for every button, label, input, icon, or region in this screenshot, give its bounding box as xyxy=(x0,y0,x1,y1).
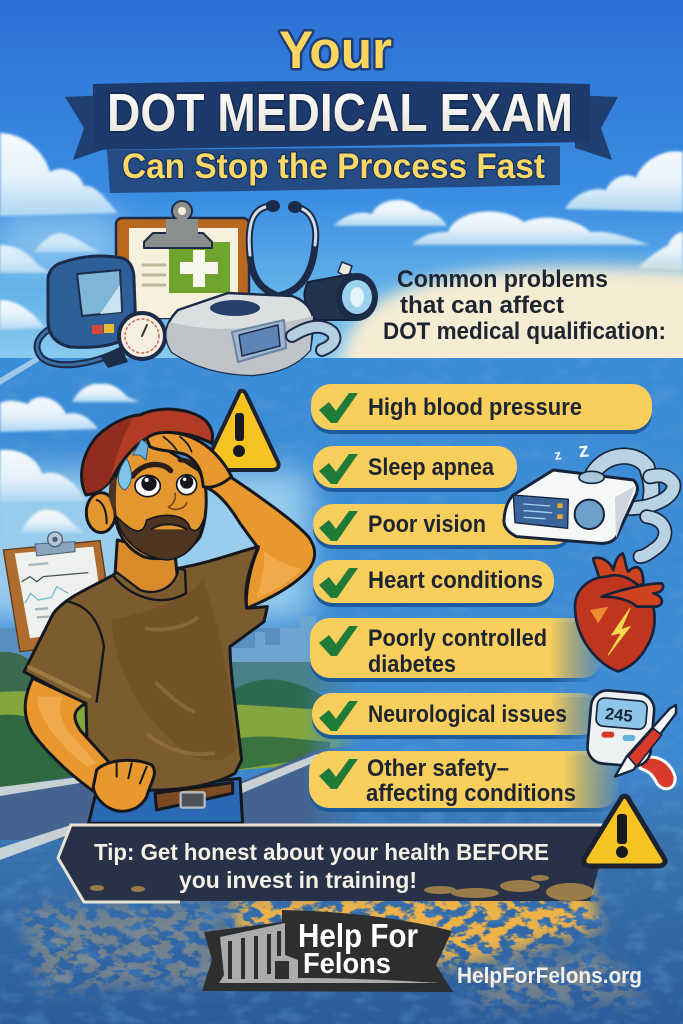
tan stains xyxy=(20,900,650,1010)
subtitle: Can Stop the Process Fast xyxy=(122,147,545,186)
intro line 3: DOT medical qualification: xyxy=(383,318,666,345)
lightning bolt xyxy=(608,608,630,655)
stethoscope xyxy=(249,200,316,322)
dropper xyxy=(615,705,676,777)
sleep letters: z xyxy=(553,446,562,463)
clipboard xyxy=(116,201,249,318)
intro line 1: Common problems xyxy=(397,266,608,293)
logo building xyxy=(219,923,440,983)
item: sleep apnea xyxy=(313,446,517,492)
background lighter sky behind man xyxy=(0,470,310,620)
title: DOT MEDICAL EXAM: DOT MEDICAL EXAM xyxy=(107,83,573,143)
tip text: Tip: Get honest about your health BEFORE xyxy=(94,839,549,865)
logo: Help For Felons xyxy=(202,910,453,992)
item: other safety-affecting conditions xyxy=(309,751,619,812)
checklist xyxy=(309,384,652,812)
shirt collar xyxy=(113,568,186,600)
title xyxy=(65,21,618,193)
CPAP top button xyxy=(579,471,604,483)
aorta xyxy=(593,553,643,600)
neck xyxy=(115,540,178,594)
warning sign lower xyxy=(584,796,665,866)
item: heart conditions: Heart conditions xyxy=(368,567,543,594)
CPAP knob xyxy=(575,500,604,529)
banner stains xyxy=(90,875,594,901)
meter reading: 245 xyxy=(604,704,634,726)
cap back panel xyxy=(83,418,133,493)
icon: heart xyxy=(575,553,663,671)
shirt xyxy=(24,547,267,790)
clouds xyxy=(0,133,683,533)
fist xyxy=(93,760,154,811)
raised arm xyxy=(203,476,315,608)
item: poorly controlled diabetes: diabetes xyxy=(368,651,456,678)
item: poorly controlled diabetes xyxy=(310,618,602,682)
blood pressure monitor xyxy=(48,256,136,347)
item: sleep apnea: Sleep apnea xyxy=(368,454,495,481)
pressure gauge xyxy=(100,313,165,368)
item: heart conditions xyxy=(313,560,554,607)
ribbon left tail xyxy=(65,95,108,160)
item: other safety-affecting conditions: Other safety– xyxy=(367,755,509,782)
background sky xyxy=(0,0,683,362)
thermometer bulb xyxy=(640,757,675,789)
sweat drops xyxy=(118,458,131,490)
camera style lens device xyxy=(304,262,378,321)
ribbon right tail xyxy=(575,95,618,160)
belt buckle xyxy=(181,792,205,808)
hand on forehead xyxy=(147,432,232,487)
tip text xyxy=(94,839,549,893)
tip text: you invest in training! xyxy=(179,867,417,893)
red cap xyxy=(82,409,213,495)
nose xyxy=(168,493,187,509)
mouth xyxy=(152,524,187,529)
beard xyxy=(117,515,203,560)
cream panel behind intro text xyxy=(330,254,683,358)
background lower blue xyxy=(0,358,683,1024)
icon: glucose meter and thermometer xyxy=(586,689,676,789)
item: poorly controlled diabetes: Poorly controlled xyxy=(368,625,547,652)
road markings xyxy=(0,754,322,860)
clipboard with chart behind man xyxy=(3,532,115,652)
arm highlight xyxy=(257,550,302,598)
icon: CPAP machine xyxy=(504,438,674,557)
ground mottling xyxy=(20,860,650,1010)
item: poor vision: Poor vision xyxy=(368,511,486,538)
main title banner xyxy=(93,81,590,150)
logo wordmark: Help For xyxy=(298,917,418,954)
pants xyxy=(89,778,243,823)
logo: Help For Felons: Felons xyxy=(303,948,391,980)
hip arm xyxy=(25,678,110,793)
icon: CPAP machine: z xyxy=(577,438,590,462)
tip banner xyxy=(58,825,612,902)
item: neurological issues xyxy=(312,693,602,739)
heart body xyxy=(575,575,655,671)
roadside scenery xyxy=(0,616,360,840)
title word: Your: Your xyxy=(279,21,392,80)
item: other safety-affecting conditions: affecting conditions xyxy=(366,780,576,807)
road streak under equipment xyxy=(0,358,44,385)
pulmonary vessel xyxy=(602,583,663,607)
city skyline xyxy=(232,616,316,662)
hair xyxy=(108,477,117,517)
CPAP display xyxy=(513,495,568,528)
cloud base haze at left xyxy=(0,210,120,270)
background texture xyxy=(0,358,683,1024)
item: high blood pressure: High blood pressure xyxy=(368,394,582,421)
ear xyxy=(86,493,116,533)
arm highlight lower xyxy=(37,697,97,767)
CPAP machine on table xyxy=(166,293,314,375)
blood pressure monitor hose xyxy=(37,322,125,365)
CPAP tubing xyxy=(593,456,674,557)
eyes xyxy=(135,475,160,497)
intro line 2: that can affect xyxy=(400,292,564,319)
item: poor vision xyxy=(313,504,573,549)
face xyxy=(114,437,206,558)
glucose meter xyxy=(586,689,656,768)
CPAP body xyxy=(504,470,637,543)
shirt folds xyxy=(112,580,237,761)
warning sign upper xyxy=(205,391,279,470)
orange stains xyxy=(230,860,600,965)
eyebrows xyxy=(133,464,171,476)
subtitle banner xyxy=(107,146,560,193)
man: worried driver xyxy=(24,409,315,823)
intro text xyxy=(383,266,666,345)
medical equipment illustration xyxy=(37,200,378,375)
CPAP hose xyxy=(292,327,334,350)
belt xyxy=(155,783,233,810)
website url: HelpForFelons.org xyxy=(457,963,642,988)
item: high blood pressure xyxy=(311,384,652,434)
item: neurological issues: Neurological issues xyxy=(368,701,567,728)
